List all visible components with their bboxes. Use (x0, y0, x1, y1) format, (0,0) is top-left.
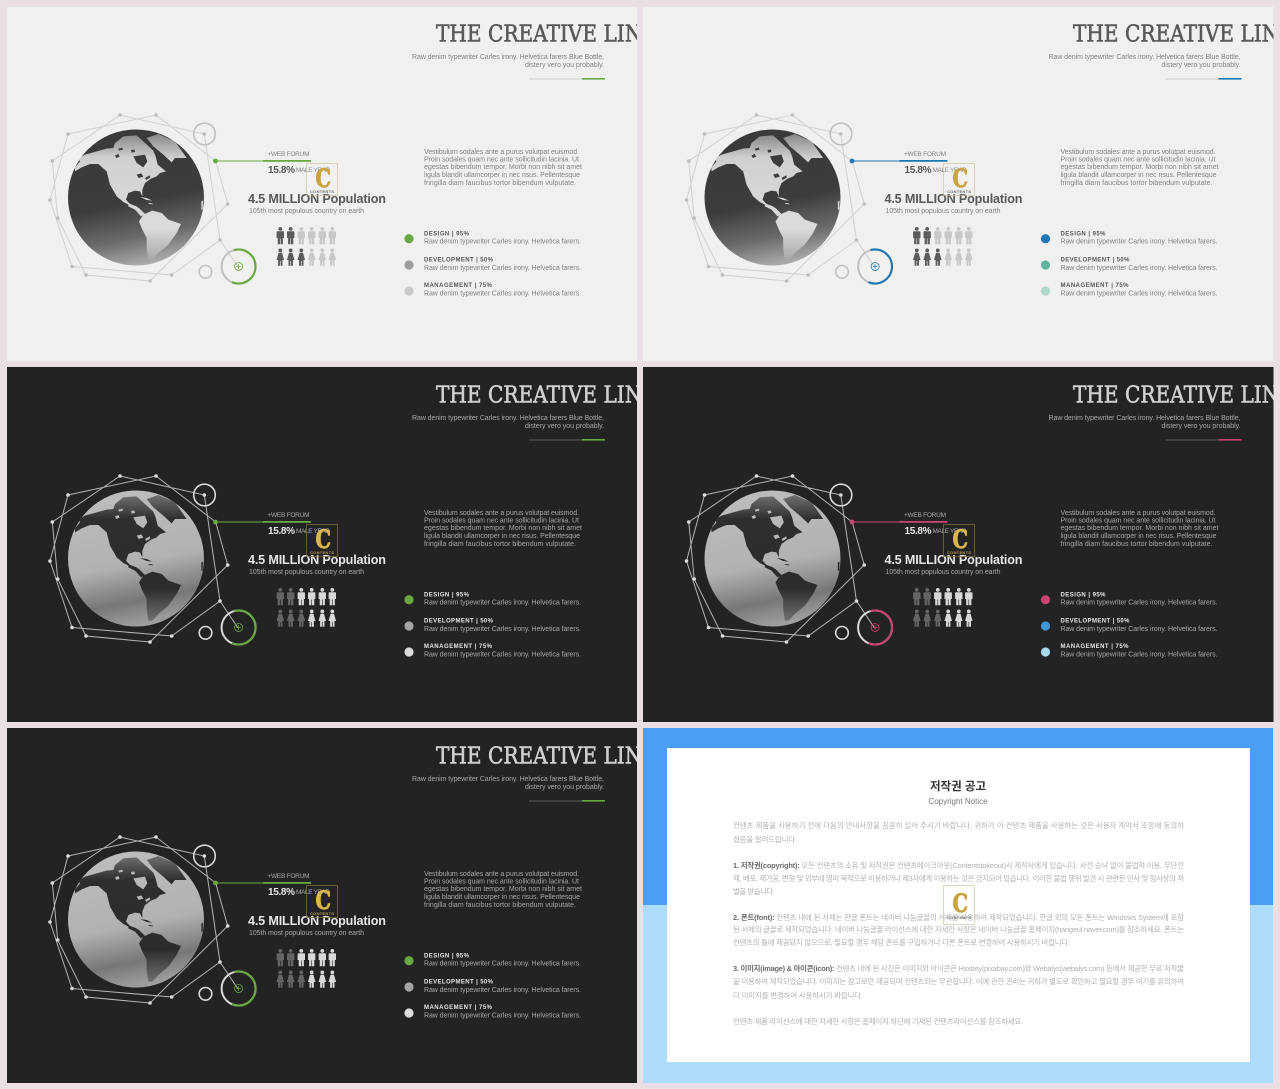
watermark slide 3: C (316, 525, 331, 554)
body text (424, 871, 582, 909)
watermark slide 2: C (952, 164, 968, 193)
legend: Raw denim typewriter Carles irony. Helvetica farers. (1060, 652, 1218, 658)
population heading: 4.5 MILLION Population (884, 553, 1022, 567)
body text: egestas bibendum tempor. Morbi non nibh sit amet (424, 164, 582, 171)
legend: Raw denim typewriter Carles irony. Helvetica farers. (424, 960, 581, 968)
watermark slide 3 (306, 524, 338, 556)
body text: egestas bibendum tempor. Morbi non nibh sit amet (1060, 525, 1219, 532)
accent ring (232, 610, 256, 644)
body text: Vestibulum sodales ante a purus volutpat euismod. (424, 149, 579, 156)
people icons (913, 227, 973, 266)
stat label: +WEB FORUM (904, 512, 946, 519)
subtitle: distery vero you probably. (525, 62, 604, 69)
legend: DEVELOPMENT | 50% (1060, 258, 1130, 264)
connector (850, 159, 948, 163)
legend: Raw denim typewriter Carles irony. Helvetica farers. (1060, 290, 1218, 298)
accent ring (868, 249, 892, 283)
watermark slide 2 (944, 164, 974, 196)
population heading: 105th most populous country on earth (886, 569, 1001, 576)
population heading (248, 192, 386, 215)
body text: ligula blandit ullamcorper in nec risus. Pellentesque (424, 172, 580, 179)
subtitle: distery vero you probably. (525, 423, 604, 430)
globe (704, 490, 840, 626)
watermark slide 1: C (316, 164, 331, 193)
subtitle (1048, 415, 1241, 430)
accent ring (868, 610, 892, 644)
subtitle (412, 54, 604, 69)
globe (68, 130, 204, 266)
stat label: MALE YEAR (296, 167, 330, 174)
subtitle: distery vero you probably. (1162, 62, 1241, 69)
body text: fringilla diam faucibus tortor bibendum vulputate. (1060, 541, 1213, 548)
notice heading: Copyright Notice (928, 797, 988, 806)
legend: DESIGN | 95% (424, 592, 470, 598)
watermark slide 5: C (316, 886, 331, 915)
legend: MANAGEMENT | 75% (424, 644, 493, 650)
body text: egestas bibendum tempor. Morbi non nibh sit amet (424, 886, 582, 893)
body text (424, 510, 582, 548)
panel: slide 2 light blue (643, 7, 1280, 361)
people icons (276, 949, 336, 988)
legend: DESIGN | 95% (424, 954, 470, 960)
subtitle (1048, 54, 1241, 69)
stat label: 15.8% (268, 887, 295, 898)
legend: Raw denim typewriter Carles irony. Helvetica farers. (424, 238, 581, 246)
watermark slide 3: CONTENTS (310, 550, 334, 555)
legend: MANAGEMENT | 75% (1060, 644, 1129, 650)
body text: ligula blandit ullamcorper in nec risus. Pellentesque (1060, 172, 1217, 179)
legend: DEVELOPMENT | 50% (424, 258, 494, 264)
body text: Proin sodales quam nec ante sollicitudin lacinia. Ut (424, 878, 579, 886)
stat label: 15.8% (904, 165, 932, 176)
subtitle: Raw denim typewriter Carles irony. Helvetica farers Blue Bottle, (1048, 54, 1241, 61)
stat label: +WEB FORUM (904, 151, 946, 158)
legend: Raw denim typewriter Carles irony. Helvetica farers. (424, 265, 581, 272)
legend: MANAGEMENT | 75% (1060, 283, 1129, 289)
title underline (529, 800, 605, 802)
subtitle: distery vero you probably. (525, 784, 604, 791)
title underline (529, 439, 605, 441)
stat label (268, 512, 330, 537)
stat label: 15.8% (904, 526, 932, 537)
notice body: 재, 배포, 재가공, 변형 및 외부에 영리 목적으로 이용하거나 제3자에게 이용하는 것은 금지되어 있습니다. 이러한 불법 행위 발견 시 관련된 민사 및 형사상의 처 (733, 874, 1184, 883)
legend: Raw denim typewriter Carles irony. Helvetica farers. (424, 1012, 581, 1020)
stat label: 15.8% (268, 165, 295, 176)
population heading: 4.5 MILLION Population (248, 553, 386, 567)
globe network (48, 835, 256, 1006)
legend: Raw denim typewriter Carles irony. Helvetica farers. (1060, 626, 1218, 633)
notice heading: 저작권 공고 (930, 779, 986, 793)
panel: slide 1 light green (7, 7, 657, 361)
body text: ligula blandit ullamcorper in nec risus. Pellentesque (424, 894, 580, 901)
legend (1041, 232, 1218, 298)
body text: Vestibulum sodales ante a purus volutpat euismod. (1060, 510, 1216, 517)
population heading (884, 553, 1022, 576)
body text: Proin sodales quam nec ante sollicitudin lacinia. Ut (1060, 156, 1216, 164)
population heading: 105th most populous country on earth (249, 208, 364, 215)
notice body: 3. 이미지(image) & 아이콘(icon): 컨텐츠 내에 된 사진은 이미지와 아이콘은 Hxxboy(pixabay.com)와 Webalys(webalys.com) 등에서 제공한 무료 저작물 (733, 964, 1184, 973)
watermark slide 4 (944, 524, 974, 556)
stat label: +WEB FORUM (268, 873, 310, 880)
connector (213, 881, 311, 885)
people icons (276, 588, 336, 627)
legend: Raw denim typewriter Carles irony. Helvetica farers. (1060, 265, 1218, 272)
stat label: MALE YEAR (296, 528, 330, 535)
subtitle: distery vero you probably. (1162, 423, 1241, 430)
watermark slide 5 (306, 886, 338, 918)
body text: Vestibulum sodales ante a purus volutpat euismod. (424, 871, 579, 878)
legend: MANAGEMENT | 75% (424, 283, 493, 289)
watermark slide 1 (306, 164, 338, 196)
connector (213, 520, 311, 524)
body text: fringilla diam faucibus tortor bibendum vulputate. (424, 541, 576, 548)
legend: DEVELOPMENT | 50% (424, 618, 494, 624)
body text (1060, 149, 1219, 187)
title underline (529, 78, 605, 80)
accent ring (232, 249, 256, 283)
stat label (268, 873, 330, 898)
globe network (685, 474, 892, 644)
body text (424, 149, 582, 187)
legend: Raw denim typewriter Carles irony. Helvetica farers. (424, 290, 581, 298)
population heading: 4.5 MILLION Population (248, 192, 386, 206)
body text: Proin sodales quam nec ante sollicitudin lacinia. Ut (424, 518, 579, 524)
watermark slide 4: C (952, 525, 968, 554)
legend: MANAGEMENT | 75% (424, 1005, 493, 1011)
population heading (884, 192, 1022, 215)
body text: egestas bibendum tempor. Morbi non nibh sit amet (424, 525, 582, 532)
legend: DESIGN | 95% (424, 232, 470, 238)
body text (1060, 510, 1219, 548)
stat label: +WEB FORUM (268, 512, 310, 519)
accent ring (232, 971, 256, 1005)
notice body: 벌을 받습니다. (733, 887, 775, 896)
legend: Raw denim typewriter Carles irony. Helvetica farers. (424, 600, 581, 606)
stat label: MALE YEAR (932, 167, 967, 174)
population heading (248, 914, 386, 937)
legend: Raw denim typewriter Carles irony. Helvetica farers. (424, 987, 581, 994)
watermark slide 5: CONTENTS (310, 911, 334, 916)
population heading (248, 553, 386, 576)
globe network (48, 113, 256, 284)
notice body: 컨텐츠의 틀에 제공되지 않으므로, 필요할 경우 해당 폰트를 구입하거나 다른 폰트로 변경하여 사용하시기 바랍니다. (733, 938, 1070, 947)
legend: DESIGN | 95% (1060, 592, 1106, 598)
connector (213, 159, 311, 163)
legend (1041, 592, 1218, 658)
body text: fringilla diam faucibus tortor bibendum vulputate. (1060, 180, 1213, 187)
subtitle (412, 776, 604, 791)
stat label (268, 151, 330, 176)
body text: fringilla diam faucibus tortor bibendum vulputate. (424, 180, 576, 187)
body text: Proin sodales quam nec ante sollicitudin lacinia. Ut (424, 156, 579, 164)
body text: ligula blandit ullamcorper in nec risus. Pellentesque (424, 533, 580, 540)
title: THE CREATIVE LINE (436, 744, 657, 770)
legend: DEVELOPMENT | 50% (1060, 618, 1130, 624)
globe network (48, 474, 256, 644)
body text: Vestibulum sodales ante a purus volutpat euismod. (424, 510, 579, 517)
legend: Raw denim typewriter Carles irony. Helvetica farers. (1060, 238, 1218, 246)
subtitle: Raw denim typewriter Carles irony. Helvetica farers Blue Bottle, (412, 776, 604, 783)
connector (850, 520, 948, 524)
globe (704, 130, 840, 266)
title underline (1166, 78, 1242, 80)
legend: Raw denim typewriter Carles irony. Helvetica farers. (424, 652, 581, 658)
watermark slide 1: CONTENTS (310, 189, 334, 194)
legend: Raw denim typewriter Carles irony. Helvetica farers. (1060, 600, 1218, 606)
subtitle (412, 415, 604, 430)
body text: Proin sodales quam nec ante sollicitudin lacinia. Ut (1060, 518, 1216, 524)
subtitle: Raw denim typewriter Carles irony. Helvetica farers Blue Bottle, (1048, 415, 1241, 422)
panel: slide 4 dark pink (643, 367, 1280, 722)
legend (404, 232, 581, 298)
title: THE CREATIVE LINE (436, 382, 657, 408)
subtitle: Raw denim typewriter Carles irony. Helvetica farers Blue Bottle, (412, 415, 604, 422)
watermark slide 4: CONTENTS (947, 550, 971, 555)
body text: Vestibulum sodales ante a purus volutpat euismod. (1060, 149, 1216, 156)
legend (404, 954, 581, 1020)
notice body: 2. 폰트(font): 컨텐츠 내에 된 서체는 한글 폰트는 네이버 나눔글꼴의 서체를 사용하여 제작되었습니다. 한글 외의 모든 폰트는 Windows System에 포함 (733, 913, 1184, 922)
stat label: 15.8% (268, 526, 295, 537)
legend: DEVELOPMENT | 50% (424, 980, 494, 986)
population heading: 105th most populous country on earth (886, 208, 1001, 215)
population heading: 4.5 MILLION Population (248, 914, 386, 928)
legend: DESIGN | 95% (1060, 232, 1106, 238)
stat label (904, 151, 967, 176)
notice body (733, 821, 1184, 1026)
notice body: 셨음을 알려드립니다. (733, 835, 797, 844)
globe (68, 490, 204, 626)
stat label: MALE YEAR (296, 889, 330, 896)
people icons (913, 588, 973, 627)
panel: slide 3 dark green (7, 367, 657, 722)
stat label (904, 512, 967, 537)
title underline (1166, 439, 1242, 441)
watermark notice (944, 886, 974, 924)
population heading: 4.5 MILLION Population (884, 192, 1022, 206)
notice body: 을 이용하여 제작되었습니다. 이미지는 참고로만 제공되며 컨텐츠와는 무관합니다. 이에 관한 권리는 귀하가 별도로 확인하고 필요할 경우 여기를 유의하여 (733, 977, 1184, 986)
body text: ligula blandit ullamcorper in nec risus. Pellentesque (1060, 533, 1217, 540)
globe (68, 852, 204, 988)
title: THE CREATIVE LINE (436, 22, 657, 48)
globe network (685, 113, 892, 284)
watermark notice: C (952, 889, 968, 918)
notice body: 된 서체의 글꼴로 제작되었습니다. 네이버 나눔글꼴 라이선스에 대한 자세한 사항은 네이버 나눔글꼴 홈페이지(hangeul.naver.com)를 참조하세요. 폰트는 (733, 925, 1184, 934)
notice body: 다 이미지를 변경하여 사용하시기 바랍니다. (733, 991, 863, 1000)
notice body: 1. 저작권(copyright): 모든 컨텐츠의 소유 및 저작권은 컨텐츠메이크아웃(Contentstokeout)사 제작사에게 있습니다. 사전 승낙 없이 불법적 이용, 무단전 (733, 861, 1184, 870)
population heading: 105th most populous country on earth (249, 930, 364, 937)
watermark notice: CONTENTS (947, 915, 971, 920)
legend (404, 592, 581, 658)
stat label: MALE YEAR (932, 528, 967, 535)
watermark slide 2: CONTENTS (947, 189, 971, 194)
notice body: 컨텐츠 제품을 사용하기 전에 다음의 안내사항을 꼼꼼히 읽어 주시기 바랍니다. 귀하가 이 컨텐츠 제품을 사용하는 것은 사용자 계약서 조항에 동의하 (733, 821, 1184, 830)
stat label: +WEB FORUM (268, 151, 310, 158)
body text: egestas bibendum tempor. Morbi non nibh sit amet (1060, 164, 1219, 171)
people icons (276, 227, 336, 266)
notice body: 컨텐츠 제품 라이선스에 대한 자세한 사항은 홈페이지 하단에 기재된 컨텐츠라이선스를 참조하세요. (733, 1017, 1023, 1026)
notice heading (928, 779, 988, 806)
panel: copyright notice (643, 728, 1273, 1083)
body text: fringilla diam faucibus tortor bibendum vulputate. (424, 902, 576, 909)
legend: Raw denim typewriter Carles irony. Helvetica farers. (424, 626, 581, 633)
panel: slide 5 dark green (7, 728, 657, 1083)
population heading: 105th most populous country on earth (249, 569, 364, 576)
subtitle: Raw denim typewriter Carles irony. Helvetica farers Blue Bottle, (412, 54, 604, 61)
